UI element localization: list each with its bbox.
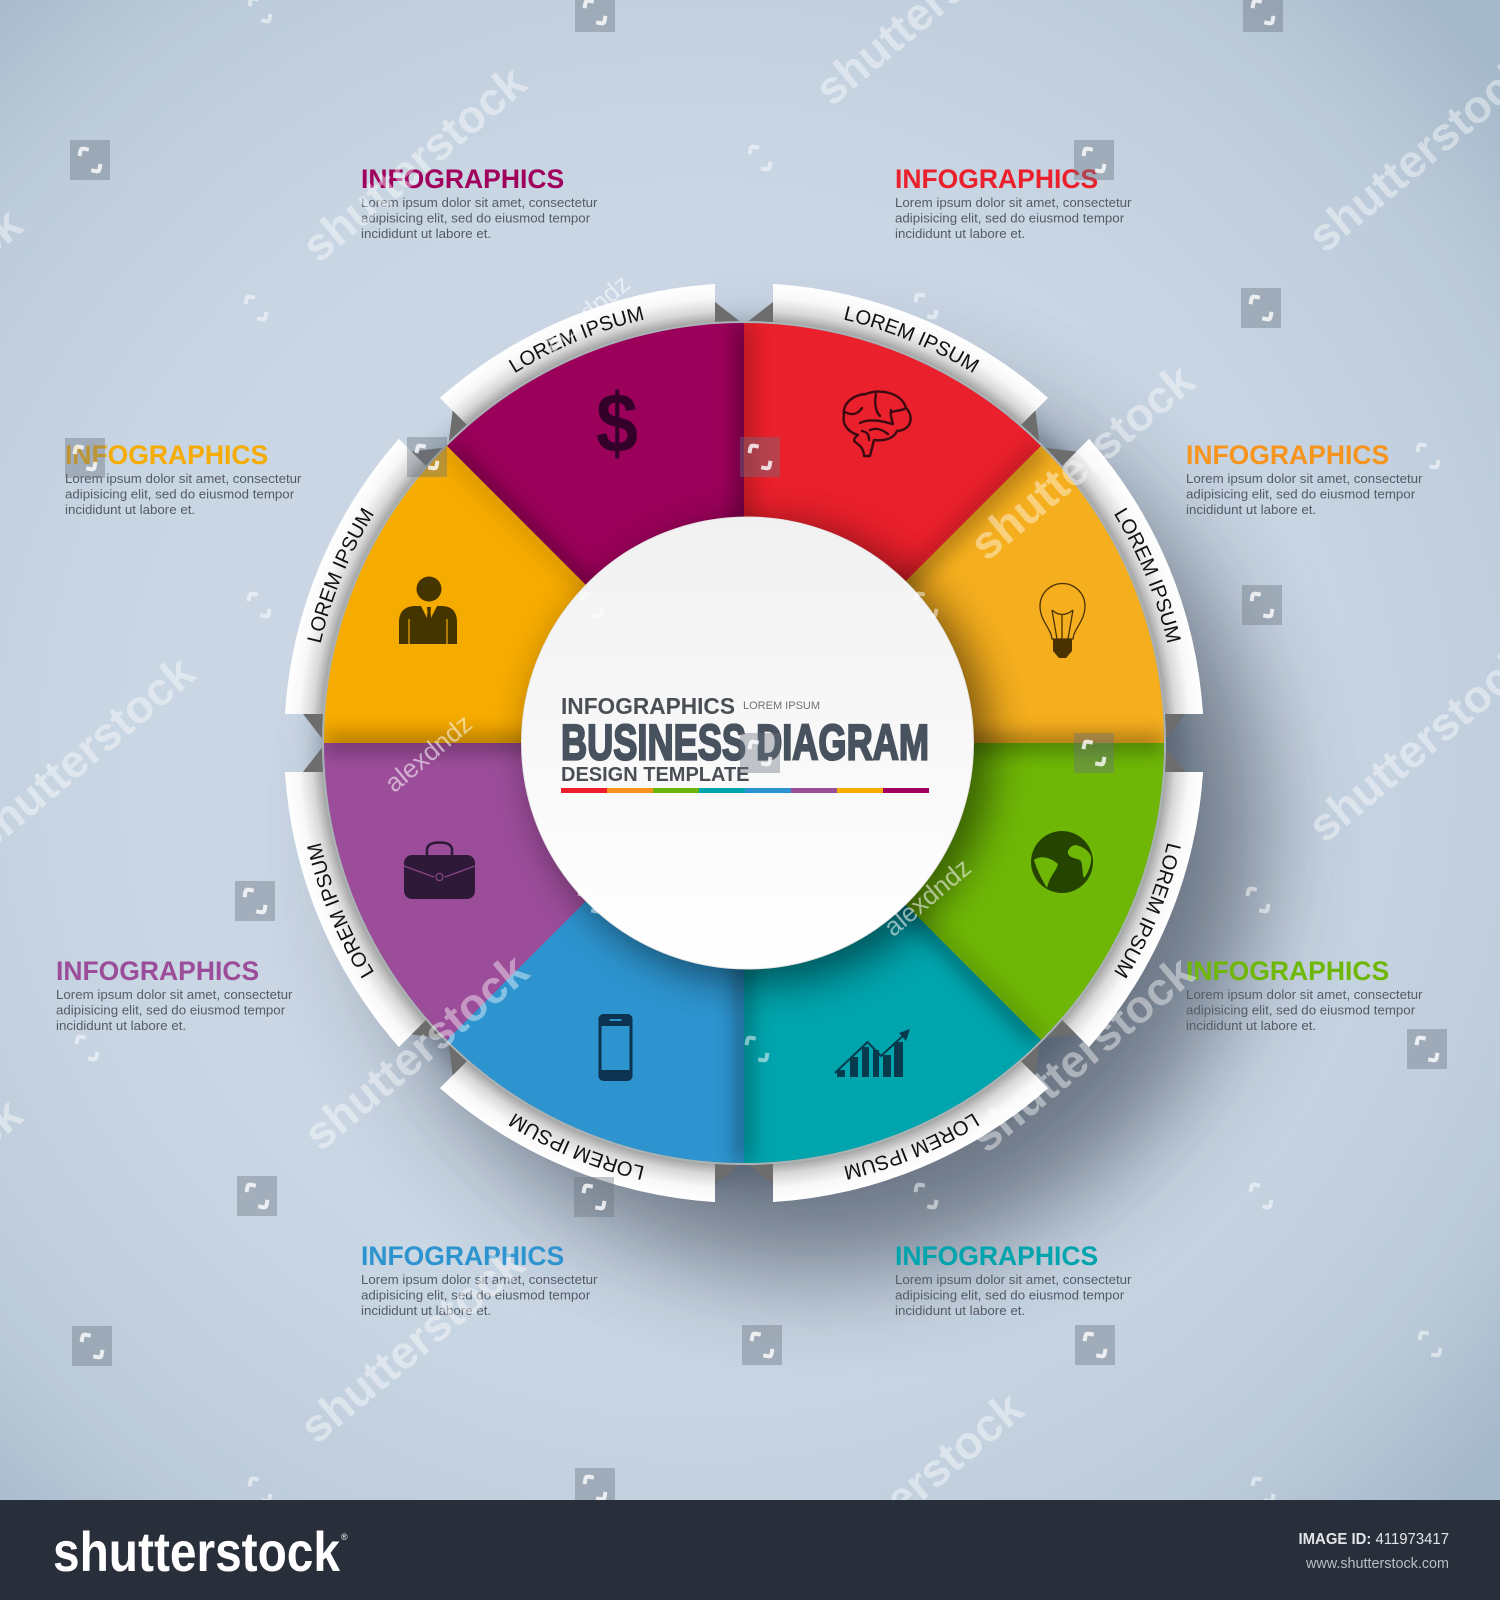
body: Lorem ipsum dolor sit amet, consectetur xyxy=(65,471,302,486)
heading: INFOGRAPHICS xyxy=(895,1241,1098,1271)
watermark overlay: alexdndz xyxy=(537,268,636,358)
icon: light bulb xyxy=(1040,584,1085,658)
body: incididunt ut labore et. xyxy=(56,1018,186,1033)
text block: magenta xyxy=(361,164,598,241)
icon: green globe xyxy=(1031,831,1093,893)
text block: green xyxy=(1186,956,1423,1033)
body: incididunt ut labore et. xyxy=(65,502,195,517)
band: red xyxy=(715,284,1048,426)
heading: INFOGRAPHICS xyxy=(361,164,564,194)
body: Lorem ipsum dolor sit amet, consectetur xyxy=(361,195,598,210)
rainbow bar xyxy=(561,788,929,793)
body: adipisicing elit, sed do eiusmod tempor xyxy=(1186,487,1416,502)
wedge: amber xyxy=(324,446,586,743)
text block: orange xyxy=(1186,440,1423,517)
body: Lorem ipsum dolor sit amet, consectetur xyxy=(1186,471,1423,486)
wedge: blue xyxy=(447,902,744,1163)
body: adipisicing elit, sed do eiusmod tempor xyxy=(65,487,295,502)
tight shadow around wheel xyxy=(318,319,1182,1183)
wedge: red xyxy=(744,323,1041,581)
panel: central circle xyxy=(522,517,974,969)
watermark overlay: alexdndz xyxy=(379,708,478,798)
central title block xyxy=(561,693,929,793)
watermark overlay: shutterstock xyxy=(789,1381,1033,1598)
title: business diagram: BUSINESS DIAGRAM xyxy=(561,714,929,770)
heading: INFOGRAPHICS xyxy=(56,956,259,986)
band: purple xyxy=(204,752,540,1088)
band: magenta xyxy=(399,203,735,539)
heading: INFOGRAPHICS xyxy=(65,440,268,470)
body: incididunt ut labore et. xyxy=(1186,1018,1316,1033)
band: blue xyxy=(440,1060,773,1202)
body: incididunt ut labore et. xyxy=(361,226,491,241)
footer url: www.shutterstock.com xyxy=(1305,1555,1449,1572)
text block: purple xyxy=(56,956,293,1033)
pie rim xyxy=(323,322,1165,1164)
body: adipisicing elit, sed do eiusmod tempor xyxy=(895,1288,1125,1303)
body: Lorem ipsum dolor sit amet, consectetur xyxy=(361,1272,598,1287)
band: amber xyxy=(285,439,427,772)
watermark overlay: shutterstock xyxy=(294,943,538,1160)
wedge: teal xyxy=(744,905,1041,1163)
text block: amber xyxy=(65,440,302,517)
heading: INFOGRAPHICS xyxy=(1186,956,1389,986)
band: teal xyxy=(753,947,1089,1283)
text block: blue xyxy=(361,1241,598,1318)
text block: teal xyxy=(895,1241,1132,1318)
wheel cast shadow xyxy=(370,380,1260,1270)
text block: red xyxy=(895,164,1132,241)
wedge: orange xyxy=(906,446,1164,743)
heading: INFOGRAPHICS xyxy=(361,1241,564,1271)
subtitle: lorem ipsum: LOREM IPSUM xyxy=(743,700,820,712)
body: adipisicing elit, sed do eiusmod tempor xyxy=(895,211,1125,226)
panel: outer ring label bands xyxy=(204,203,1284,1283)
watermark overlay: shutterstock xyxy=(290,1236,534,1453)
wedge: green xyxy=(906,743,1164,1040)
icon: phone xyxy=(598,1014,632,1081)
icon: dollar: $ xyxy=(596,376,638,470)
band: orange xyxy=(948,398,1284,734)
body: Lorem ipsum dolor sit amet, consectetur xyxy=(1186,987,1423,1002)
icon: briefcase xyxy=(404,842,475,899)
title: infographics: INFOGRAPHICS xyxy=(561,693,735,719)
body: incididunt ut labore et. xyxy=(1186,502,1316,517)
body: incididunt ut labore et. xyxy=(361,1303,491,1318)
watermark overlay: shutterstock xyxy=(292,55,536,272)
title: design template: DESIGN TEMPLATE xyxy=(561,764,750,786)
icon: businessman xyxy=(399,576,457,644)
body: Lorem ipsum dolor sit amet, consectetur xyxy=(56,987,293,1002)
heading: INFOGRAPHICS xyxy=(1186,440,1389,470)
panel: pie wedges xyxy=(244,321,1272,1184)
wedge: purple xyxy=(324,743,586,1040)
body: incididunt ut labore et. xyxy=(895,226,1025,241)
footer bar xyxy=(0,1500,1500,1600)
body: adipisicing elit, sed do eiusmod tempor xyxy=(1186,1003,1416,1018)
image id: IMAGE ID: 411973417 xyxy=(1298,1531,1449,1548)
body: incididunt ut labore et. xyxy=(895,1303,1025,1318)
body: adipisicing elit, sed do eiusmod tempor xyxy=(361,1288,591,1303)
body: Lorem ipsum dolor sit amet, consectetur xyxy=(895,1272,1132,1287)
watermark overlay: shutterstock xyxy=(960,353,1204,570)
watermark overlay: alexdndz xyxy=(878,852,977,942)
watermark overlay: shutterstock xyxy=(960,945,1204,1162)
hub shadow xyxy=(532,524,992,984)
body: Lorem ipsum dolor sit amet, consectetur xyxy=(895,195,1132,210)
heading: INFOGRAPHICS xyxy=(895,164,1098,194)
icon: chart xyxy=(835,1029,910,1077)
wedge: magenta xyxy=(447,323,744,585)
logo: registered mark: ® xyxy=(341,1532,348,1542)
logo: shutterstock: shutterstock xyxy=(53,1520,341,1583)
icon: brain xyxy=(844,392,911,456)
band: green xyxy=(1061,714,1203,1047)
body: adipisicing elit, sed do eiusmod tempor xyxy=(361,211,591,226)
body: adipisicing elit, sed do eiusmod tempor xyxy=(56,1003,286,1018)
